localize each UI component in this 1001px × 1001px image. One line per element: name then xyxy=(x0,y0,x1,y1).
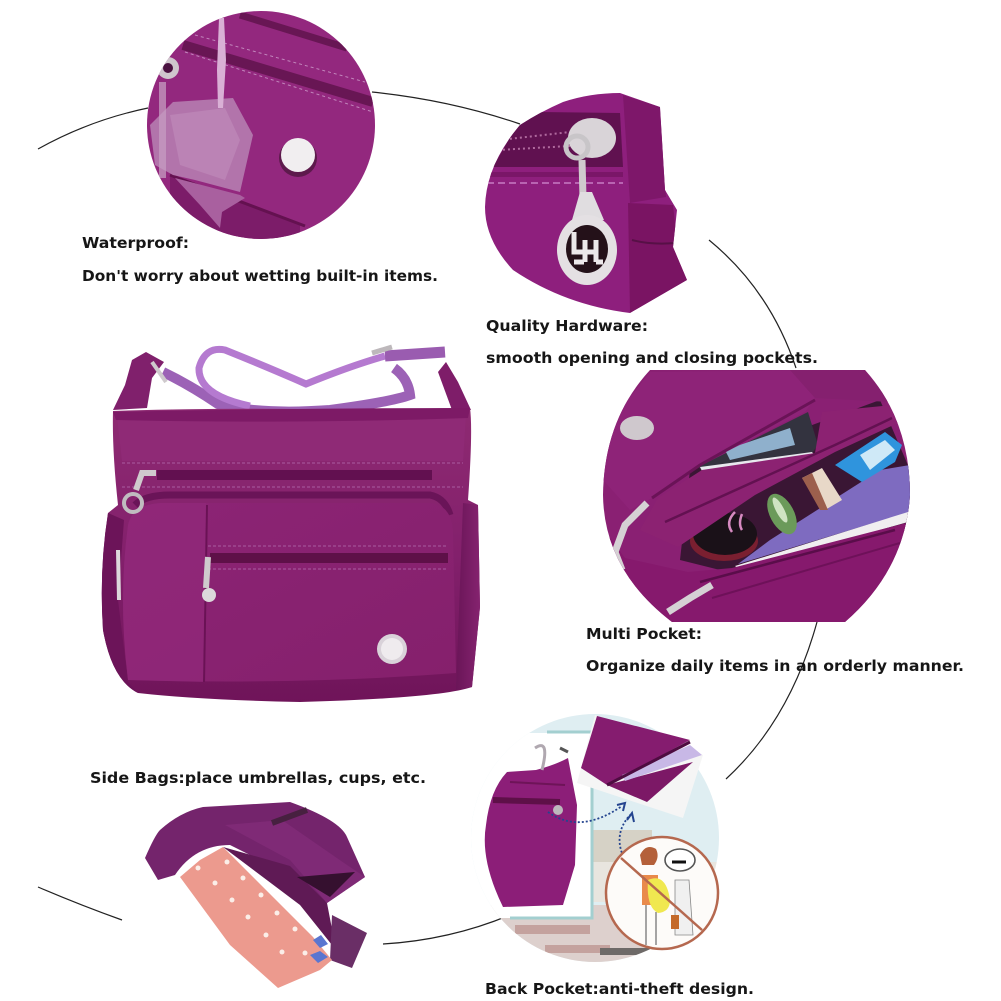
zipper pulls xyxy=(615,503,647,570)
callout line: hardware to multi pocket xyxy=(709,240,796,368)
caption: waterproof: Don't worry about wetting built-in items. xyxy=(82,267,438,285)
phone xyxy=(698,412,818,470)
callout line: waterproof to hardware xyxy=(372,92,520,124)
back pocket flap card xyxy=(577,715,703,818)
pocket zipper xyxy=(210,553,448,563)
photo: side pocket with umbrella xyxy=(145,802,367,988)
metal zip pulls xyxy=(136,473,156,490)
blue flower xyxy=(310,935,328,963)
side pockets xyxy=(102,513,138,693)
caption: waterproof: Waterproof: xyxy=(82,234,189,252)
photo: zipper pull detail xyxy=(485,93,687,313)
lavender handle loop xyxy=(199,349,385,406)
water stream xyxy=(217,18,226,108)
dotted blue arrows xyxy=(548,803,634,860)
metal button xyxy=(279,144,317,177)
lavender strap band xyxy=(163,368,410,412)
bag body xyxy=(102,408,480,702)
caption: quality hardware: smooth opening and closing pockets. xyxy=(486,349,818,367)
brick pavement xyxy=(490,905,650,962)
caption: back pocket: Back Pocket:anti-theft design. xyxy=(485,980,754,998)
water patch xyxy=(150,98,253,192)
caption: multi pocket: Multi Pocket: xyxy=(586,625,702,643)
pocket vertical seam xyxy=(204,505,207,682)
callout line: side bags to back pocket xyxy=(383,915,510,944)
small bag in collage xyxy=(485,746,577,907)
callout line: waterproof left xyxy=(38,108,148,149)
caption: side bags: Side Bags:place umbrellas, cups, etc. xyxy=(90,769,426,787)
front pocket xyxy=(123,503,456,681)
caption: quality hardware: Quality Hardware: xyxy=(486,317,648,335)
strap end xyxy=(330,915,367,968)
icon: metal zipper pull xyxy=(557,118,617,285)
tablet xyxy=(738,465,910,564)
logo badge xyxy=(377,634,407,664)
callout line: multi pocket to back pocket xyxy=(726,622,817,779)
caption: multi pocket: Organize daily items in an orderly manner. xyxy=(586,657,964,675)
upper zipper xyxy=(157,470,432,480)
top panel xyxy=(117,415,466,461)
callout line: side bags left xyxy=(38,887,122,920)
lower pocket xyxy=(604,522,910,624)
caption: multi pocket xyxy=(586,625,964,675)
white panel with teal frame xyxy=(470,733,592,918)
right strap end xyxy=(385,352,445,356)
photo: multi pocket circle xyxy=(600,368,915,624)
photo: waterproof fabric circle xyxy=(147,11,375,239)
side gathered strap xyxy=(623,95,666,203)
compact mirror xyxy=(690,536,758,561)
rivet xyxy=(157,57,179,79)
lipstick xyxy=(802,468,842,510)
building skyline xyxy=(592,830,652,862)
blue card xyxy=(835,432,902,482)
pocket top band xyxy=(135,495,450,515)
middle pocket band xyxy=(682,405,898,544)
no-pickpocket circle xyxy=(606,837,718,949)
interior xyxy=(680,400,910,575)
caption: quality hardware xyxy=(486,317,818,367)
pink polka dot umbrella xyxy=(180,847,332,988)
shoulder strap tabs xyxy=(113,352,164,410)
metal badge xyxy=(620,416,654,440)
main purple shoulder bag xyxy=(102,347,480,702)
metal buckle xyxy=(152,362,166,382)
photo: back pocket anti-theft collage xyxy=(490,714,719,962)
caption: waterproof xyxy=(82,234,438,285)
top flap xyxy=(604,399,740,481)
